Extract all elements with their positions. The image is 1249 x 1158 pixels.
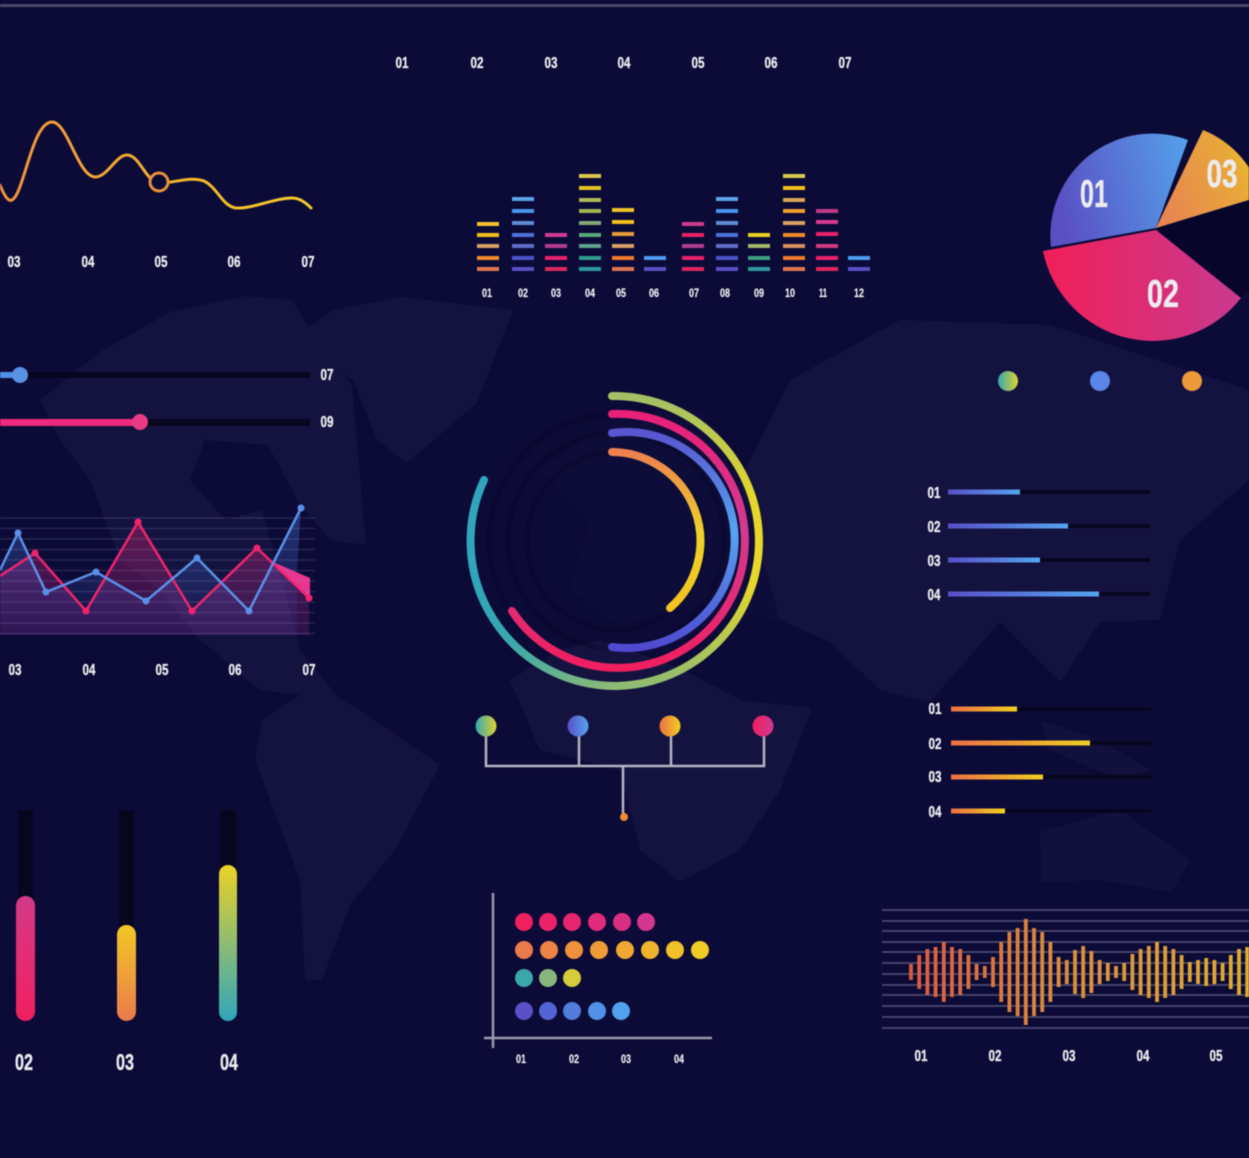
right progress bars orange (928, 701, 1151, 821)
dark slice (1156, 200, 1249, 298)
dot row 2 (515, 941, 709, 959)
top axis labels: 01 (396, 55, 409, 72)
outer ring (471, 396, 759, 686)
labels: 03 (928, 769, 942, 786)
column 05 (612, 208, 634, 271)
equalizer labels: 12 (854, 286, 864, 300)
bar 03: 03 (116, 1049, 134, 1075)
line chart labels: 04 (82, 662, 96, 679)
grid lines (0, 518, 315, 634)
dot chart labels (516, 1052, 684, 1066)
equalizer labels: 11 (819, 286, 827, 300)
slice 03 (1156, 130, 1249, 228)
pie labels (1080, 153, 1238, 316)
dot chart labels: 04 (674, 1052, 684, 1066)
blue area (0, 508, 301, 635)
pink ring (512, 414, 745, 668)
equalizer labels: 04 (585, 286, 595, 300)
equalizer labels: 07 (689, 286, 699, 300)
column 07 (682, 222, 704, 271)
blue slider: 07 (320, 367, 334, 384)
blue ring (612, 432, 735, 648)
wave bars (911, 919, 1247, 1025)
pink area (0, 522, 309, 635)
labels (928, 485, 941, 604)
column 03 (545, 233, 567, 271)
vertical bars (15, 810, 238, 1075)
wave line chart (0, 122, 315, 271)
pink line (0, 522, 309, 611)
labels (928, 701, 942, 821)
pink corner (273, 562, 310, 598)
dot row 3 (515, 969, 581, 987)
node 4 (752, 716, 774, 736)
wave chart labels: 04 (1136, 1048, 1150, 1065)
top edge line (0, 4, 1249, 7)
labels: 04 (928, 587, 941, 604)
node 3 (660, 716, 680, 736)
pie labels: 02 (1147, 273, 1179, 316)
dot chart labels: 03 (621, 1052, 631, 1066)
top axis labels: 04 (618, 55, 631, 72)
wave labels (8, 254, 315, 271)
wave labels: 04 (82, 254, 95, 271)
wave chart labels: 05 (1210, 1048, 1223, 1065)
column 02 (512, 197, 534, 271)
pie chart (1043, 130, 1249, 341)
wave labels: 07 (302, 254, 315, 271)
dot matrix chart (484, 893, 712, 1066)
slice 02 (1043, 230, 1241, 341)
pie labels: 03 (1206, 153, 1238, 196)
double line area chart (0, 504, 316, 679)
root node (620, 813, 628, 821)
top axis labels (396, 55, 852, 72)
column 12 (848, 256, 870, 271)
right progress bars blue (928, 485, 1150, 604)
line chart labels: 03 (8, 662, 22, 679)
equalizer labels: 05 (616, 286, 626, 300)
dot chart labels: 01 (516, 1052, 526, 1066)
wave labels: 05 (154, 254, 168, 271)
bar 02: 02 (15, 1049, 33, 1075)
pink slider: 09 (320, 414, 334, 431)
column 09 (748, 233, 770, 271)
dot row 1 (515, 913, 655, 931)
pie labels: 01 (1080, 173, 1108, 216)
equalizer labels: 09 (754, 286, 764, 300)
ring tracks (489, 414, 743, 668)
node 2 (568, 716, 588, 736)
labels: 02 (928, 519, 941, 536)
column 06 (644, 256, 666, 271)
line chart labels: 06 (228, 662, 242, 679)
labels: 03 (928, 553, 941, 570)
wave labels: 06 (228, 254, 241, 271)
dot row 4 (515, 1002, 630, 1020)
top axis labels: 03 (544, 55, 558, 72)
tree connector (476, 716, 774, 821)
column 04 (579, 174, 601, 271)
equalizer labels: 03 (551, 286, 561, 300)
equalizer labels: 08 (720, 286, 730, 300)
blue line (0, 508, 301, 611)
bar 03 (116, 810, 136, 1075)
labels: 04 (928, 804, 942, 821)
data points (14, 504, 312, 614)
equalizer labels (482, 286, 864, 300)
wave chart labels: 02 (988, 1048, 1002, 1065)
equalizer labels: 01 (482, 286, 492, 300)
top axis labels: 06 (764, 55, 778, 72)
dot chart labels: 02 (569, 1052, 579, 1066)
column 08 (716, 197, 738, 271)
pink slider (0, 414, 334, 431)
column 11 (816, 209, 838, 271)
world map (40, 296, 1249, 980)
equalizer chart (477, 174, 870, 300)
radial ring chart (471, 396, 759, 686)
top axis labels: 02 (470, 55, 484, 72)
legend dots (998, 371, 1202, 391)
node 1 (476, 716, 496, 736)
labels: 01 (928, 485, 941, 502)
wave labels: 03 (8, 254, 21, 271)
column 01 (477, 222, 499, 271)
blue slider (0, 367, 334, 384)
labels: 01 (928, 701, 942, 718)
line chart labels: 07 (302, 662, 316, 679)
orange ring (612, 452, 700, 608)
line chart labels: 05 (156, 662, 169, 679)
line chart labels (8, 662, 316, 679)
bar 02 (15, 810, 35, 1075)
sound wave chart (882, 910, 1249, 1065)
equalizer labels: 02 (518, 286, 528, 300)
wave chart labels: 01 (914, 1048, 928, 1065)
bar 04: 04 (220, 1049, 238, 1075)
equalizer labels: 10 (785, 286, 795, 300)
bar 04 (219, 810, 238, 1075)
wave chart labels (914, 1048, 1223, 1065)
axes (484, 893, 712, 1048)
top axis labels: 05 (692, 55, 705, 72)
wave chart labels: 03 (1062, 1048, 1076, 1065)
column 10 (783, 174, 805, 271)
slice 01 (1050, 134, 1188, 247)
sliders (0, 367, 334, 431)
marker (150, 173, 168, 191)
top axis labels: 07 (838, 55, 852, 72)
labels: 02 (928, 736, 942, 753)
equalizer labels: 06 (649, 286, 659, 300)
